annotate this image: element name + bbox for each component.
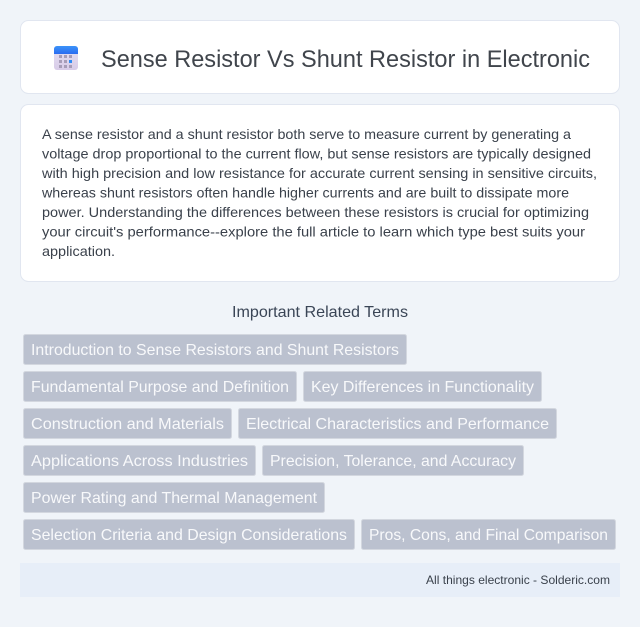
chip: Introduction to Sense Resistors and Shunt Resistors xyxy=(31,342,399,359)
text block: description: application. xyxy=(42,243,115,259)
chip: Pros, Cons, and Final Comparison xyxy=(369,527,608,544)
chip: Applications Across Industries xyxy=(31,453,248,470)
chip: Electrical Characteristics and Performance xyxy=(246,416,549,433)
text block: description xyxy=(41,126,597,259)
chip: Selection Criteria and Design Considerations xyxy=(31,527,347,544)
footer: All things electronic - Solderic.com xyxy=(426,573,610,587)
panel: intro text xyxy=(20,104,620,282)
chip: Power Rating and Thermal Management xyxy=(31,490,318,507)
chip xyxy=(262,446,524,476)
panel: header xyxy=(20,20,620,94)
chip xyxy=(238,408,556,438)
text block: description: power. Understanding the differences between these resistors is crucial for optimizing xyxy=(42,204,589,220)
title: Sense Resistor Vs Shunt Resistor in Electronic xyxy=(101,46,590,73)
heading: related terms: Important Related Terms xyxy=(232,304,408,321)
chip xyxy=(304,372,542,402)
chip xyxy=(24,520,354,550)
icon: calendar xyxy=(54,46,78,70)
text block: description: your circuit's performance--explore the full article to learn which type best suits your xyxy=(42,224,585,240)
chip xyxy=(24,372,296,402)
text block: description: with high precision and low resistance for accurate current sensing in sensitive circuits, xyxy=(41,165,597,181)
text block: description: whereas shunt resistors often handle higher currents and are built to dissipate more xyxy=(41,184,569,200)
chip: Construction and Materials xyxy=(31,416,224,433)
chip xyxy=(24,446,256,476)
chip xyxy=(24,334,406,364)
chip list: related terms xyxy=(24,334,616,550)
text block: description: A sense resistor and a shunt resistor both serve to measure current by generating a xyxy=(42,126,571,142)
footer xyxy=(20,563,620,597)
text block: description: voltage drop proportional to the current flow, but sense resistors are typically designed xyxy=(42,146,591,162)
chip: Precision, Tolerance, and Accuracy xyxy=(270,453,516,470)
chip: Fundamental Purpose and Definition xyxy=(31,379,289,396)
chip xyxy=(362,520,616,550)
chip xyxy=(24,482,324,512)
chip: Key Differences in Functionality xyxy=(311,379,534,396)
chip xyxy=(24,408,232,438)
